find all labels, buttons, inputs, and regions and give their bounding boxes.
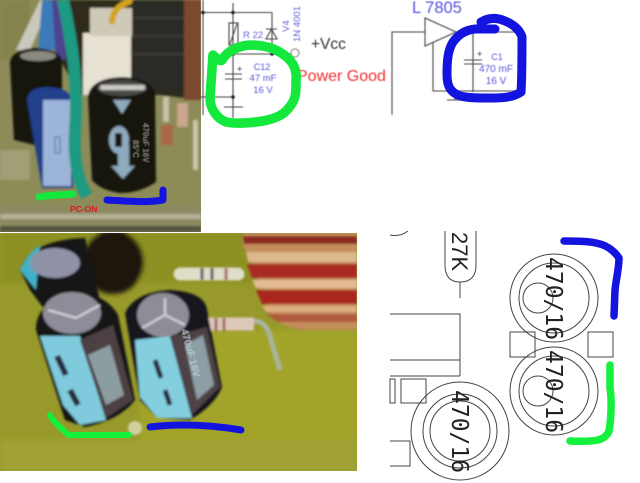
label: PC-ON: PC-ON [70, 204, 97, 214]
green marker stroke [50, 415, 129, 435]
component outlines [390, 314, 460, 376]
resistors [161, 125, 173, 145]
diode [266, 29, 277, 39]
blue marker stroke [107, 190, 163, 202]
capacitor print: 470uF 16V [178, 328, 202, 379]
schematic: L7805 regulator with C1: + [477, 49, 482, 59]
PCB layout diagram: 27K [447, 232, 472, 271]
blue marker stroke [564, 241, 619, 316]
coil [132, 0, 184, 90]
black capacitor rear [10, 48, 62, 145]
green marker circle [210, 45, 296, 123]
schematic: C12 power good: 16 V [253, 85, 273, 96]
large black capacitor [88, 77, 156, 193]
white wire [15, 0, 44, 52]
green marker stroke [570, 365, 611, 441]
inductor coil [20, 233, 357, 435]
schematic: L7805 regulator with C1: 16 V [486, 76, 507, 87]
schematic: C12 power good: +Vcc [311, 36, 346, 53]
resistor R22 [229, 23, 238, 45]
photo: capacitors on green board [0, 230, 357, 471]
resistor 2 [208, 318, 254, 330]
blue capacitor [27, 87, 73, 188]
capacitor footprint bottom [411, 382, 509, 480]
schematic: C12 power good [200, 0, 386, 118]
yellow wire [112, 0, 134, 24]
schematic: C12 power good: 1N 4001 [292, 6, 303, 42]
schematic: C12 power good: 47 mF [250, 73, 277, 84]
capacitor plates [224, 74, 243, 107]
capacitor footprint bottom: 470/16 [446, 390, 472, 473]
capacitor footprint top right: 470/16 [540, 257, 566, 340]
PCB layout diagram [390, 231, 619, 480]
labels: R 22 [243, 30, 263, 41]
resistor 1 [180, 268, 238, 280]
right capacitor [125, 290, 222, 420]
photo: power supply board with capacitors [0, 0, 201, 232]
schematic: L7805 regulator with C1: C1 [491, 52, 503, 62]
rear capacitor [20, 238, 100, 310]
transformer bobbin [83, 33, 131, 95]
schematic: C12 power good: C12 [254, 62, 270, 72]
schematic: L7805 regulator with C1: 470 mF [479, 64, 513, 75]
resistor outline 27K [445, 231, 476, 298]
capacitor footprint middle right [510, 347, 598, 435]
capacitor footprint top right [510, 254, 598, 342]
capacitor print: 470uF 16V [141, 123, 150, 163]
blue marker circle [447, 18, 522, 98]
green marker stroke [39, 194, 73, 197]
capacitor footprint middle right: 470/16 [540, 350, 566, 433]
solder blob [128, 421, 142, 435]
schematic: C12 power good: Power Good [297, 68, 386, 85]
blue marker stroke [150, 425, 241, 430]
green wire [63, 0, 87, 196]
blue wire [38, 0, 60, 50]
schematic: L7805 regulator with C1 [392, 0, 523, 115]
black capacitor behind [82, 230, 144, 294]
schematic: C12 power good: V4 [281, 20, 292, 32]
schematic: C12 power good: + [237, 64, 242, 74]
dark background above the board [60, 0, 186, 100]
left capacitor [36, 292, 135, 427]
photo: power supply board with capacitors: 85°C [131, 140, 140, 158]
